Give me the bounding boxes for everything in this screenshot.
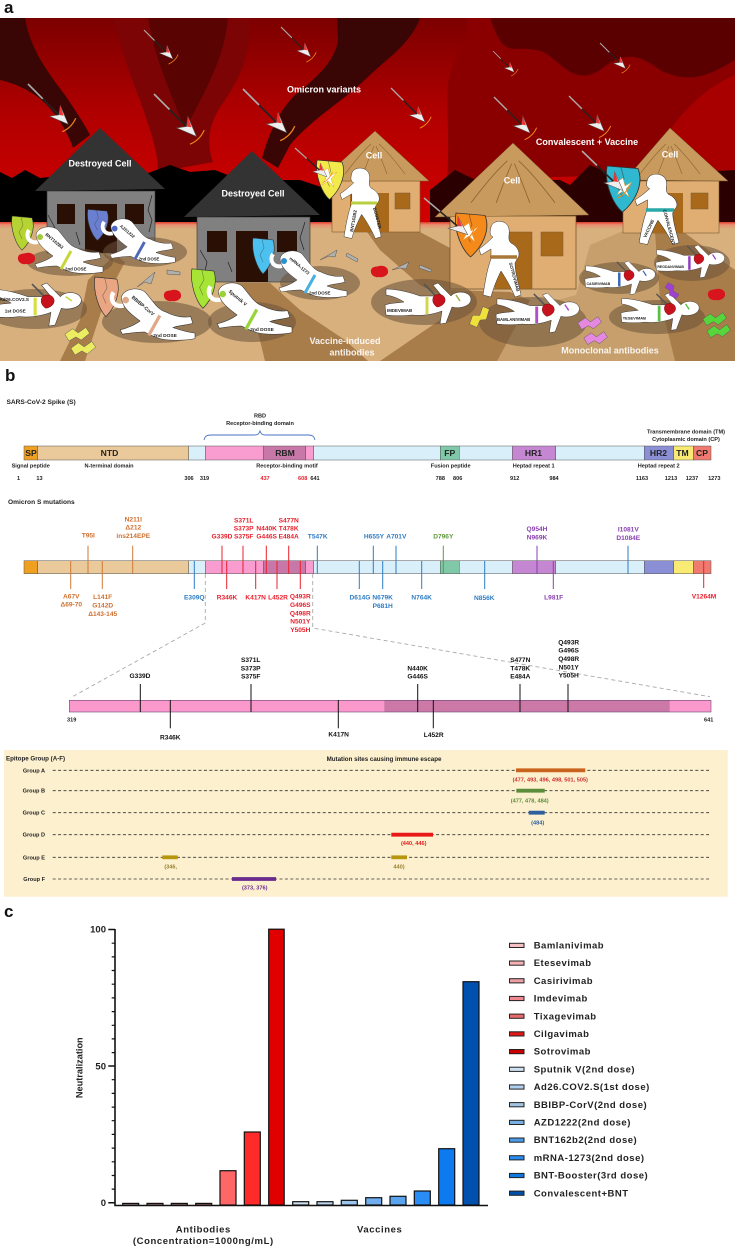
legend names: BBIBP-CorV(2nd dose) [534, 1100, 647, 1111]
residue numbers: 788 [436, 476, 445, 482]
group site labels: (477, 493, 496, 498, 501, 505) [513, 777, 588, 783]
omicron arrows [21, 22, 631, 146]
NTD mutation labels: N211I [125, 516, 142, 523]
NTD mutation labels: Δ143-145 [88, 611, 117, 618]
RBD mutation labels: G446S [256, 534, 278, 541]
crawling figure: BBIBP-CorV [94, 277, 195, 340]
standing figure: monoclonal with orange shield: SOTROVIMAB [508, 262, 521, 292]
domain names in bar: RBM [275, 448, 295, 458]
residue numbers: 912 [510, 476, 519, 482]
x axis group labels: Antibodies [176, 1224, 231, 1236]
x axis group labels: Vaccines [357, 1224, 402, 1236]
group site bars [162, 770, 585, 879]
group site labels: (440, 446) [401, 841, 427, 847]
RBD mutation labels: S373P [234, 526, 254, 533]
legend names: Cilgavimab [534, 1029, 589, 1040]
residue numbers: 1163 [636, 476, 648, 482]
RBD mutation labels: S375F [234, 534, 253, 541]
legend swatches [510, 943, 524, 1195]
crawling figure: mRNA-1273: 2nd DOSE [309, 290, 331, 296]
RBD enlarged bar [69, 700, 711, 712]
NTD mutation labels: Δ69-70 [60, 602, 82, 609]
crawling figure: BNT162b2: 2nd DOSE [65, 266, 87, 272]
crawling figure: AZD1222: 2nd DOSE [139, 257, 160, 262]
other mutation labels: L981F [544, 595, 563, 602]
TM and CP labels: Transmembrane domain (TM) [647, 430, 725, 436]
other mutation labels [433, 526, 717, 602]
crawling figure: BNT162b2 [12, 216, 103, 274]
x axis group labels: (Concentration=1000ng/mL) [133, 1236, 274, 1247]
x axis group labels [133, 1224, 402, 1247]
legend names: Imdevimab [534, 994, 588, 1005]
domain names in bar: HR2 [650, 448, 667, 458]
residue numbers: 608 [298, 476, 307, 482]
group names [23, 768, 46, 883]
legend names: Etesevimab [534, 958, 592, 969]
house: cell 3 [320, 131, 429, 232]
standing figure: convalescent + vaccine with teal shield: CONVALESCENT [662, 209, 676, 245]
label: Omicron variants: Omicron variants [287, 84, 361, 94]
residue numbers: 306 [184, 476, 194, 482]
shield arrows [290, 143, 632, 244]
enlarged bar labels: S375F [241, 674, 260, 681]
blue mutation labels: N764K [411, 595, 432, 602]
RBD mutation labels: K417N [245, 594, 266, 601]
broken arrows on the ground [137, 250, 432, 287]
blue mutation labels: N679K [372, 595, 393, 602]
other mutation labels: N969K [527, 534, 547, 541]
RBD label: Receptor-binding domain [226, 421, 294, 427]
RBD brace [204, 431, 315, 440]
NTD mutation labels: G142D [92, 603, 113, 610]
group site labels: (484) [531, 820, 544, 826]
RBD label: RBD [254, 414, 266, 420]
RBD mutation labels: N501Y [290, 619, 311, 626]
domain names in bar: CP [696, 448, 708, 458]
enlarged bar labels: S373P [241, 665, 261, 672]
RBD mutation labels: Q493R [290, 593, 311, 600]
residue numbers: 1237 [686, 476, 698, 482]
label: Convalescent + Vaccine: Convalescent + Vaccine [536, 137, 638, 147]
domain names in bar: TM [676, 448, 689, 458]
panel b: spike protein domains [4, 399, 728, 897]
mountains [0, 165, 735, 228]
lying figure: TESEVIMAB: TESEVIMAB [623, 315, 646, 320]
enlarged bar labels [67, 639, 713, 742]
RBD mutation labels: Y505H [290, 627, 311, 634]
mutation bar [24, 561, 711, 574]
lying figure: TESEVIMAB [621, 293, 699, 330]
residue numbers: 1213 [665, 476, 677, 482]
legend names [534, 940, 650, 1199]
y axis tick labels: 0 [101, 1198, 106, 1209]
sky with smoke [0, 18, 735, 228]
group site labels [164, 777, 588, 892]
enlarged bar labels: Q493R [558, 639, 579, 646]
epitope background [4, 750, 728, 897]
RBD mutation labels [212, 518, 311, 634]
group site labels: 440) [393, 865, 405, 871]
domain descriptions: N-terminal domain [84, 464, 134, 470]
domain descriptions: Fusion peptide [431, 464, 471, 470]
label: Monoclonal antibodies: Monoclonal antibodies [561, 346, 659, 356]
crawling figure: BBIBP-CorV: 2nd DOSE [153, 333, 178, 339]
domain names in bar: SP [25, 448, 37, 458]
bars [123, 929, 479, 1205]
blue mutation labels: P681H [373, 603, 393, 610]
group names: Group F [23, 877, 46, 883]
panel a: battle scene [0, 18, 735, 361]
enlarged bar labels: K417N [328, 732, 349, 739]
domain names in bar: HR1 [525, 448, 542, 458]
lying figure: Ad26.COV2.S [0, 283, 81, 326]
crawling figure: Sputnik V: Sputnik V [227, 289, 248, 308]
blue mutation labels: H655Y [364, 533, 385, 540]
lying figure: BAMLANIVIMAB [496, 293, 579, 333]
RBD label [226, 414, 294, 427]
enlarged bar labels: S477N [510, 657, 531, 664]
residue numbers: 1 [17, 476, 20, 482]
mutation ticks [71, 546, 704, 589]
blue mutation labels: D614G [350, 595, 370, 602]
other mutation labels: Q954H [527, 526, 548, 533]
residue numbers: 319 [200, 476, 209, 482]
lying figure: REGDANVIMAB: REGDANVIMAB [657, 265, 684, 269]
lying figure: CASIRIVIMAB: CASIRIVIMAB [586, 282, 611, 286]
y axis tick labels: 50 [95, 1062, 106, 1072]
legend names: Tixagevimab [534, 1011, 597, 1022]
y axis tick labels: 100 [90, 924, 106, 936]
NTD mutation labels [60, 516, 151, 618]
house: cell 3: Cell [366, 150, 382, 160]
residue numbers: 1273 [708, 476, 721, 482]
residue numbers: 984 [549, 476, 560, 482]
lying figure: BAMLANIVIMAB: BAMLANIVIMAB [497, 317, 530, 322]
blue mutation labels: N856K [474, 595, 495, 602]
group names: Group E [23, 855, 45, 861]
panel c: neutralization bar chart [74, 924, 650, 1247]
other mutation labels: I1081V [618, 526, 639, 533]
group names: Group D [23, 833, 45, 839]
domain names in bar [25, 448, 708, 458]
RBD mutation labels: S477N [279, 518, 299, 525]
ground [0, 222, 735, 361]
enlarged bar labels: G496S [558, 648, 580, 655]
legend names: AZD1222(2nd dose) [534, 1118, 631, 1128]
enlarged bar labels: G446S [407, 674, 429, 681]
blue mutation labels: A701V [386, 533, 407, 540]
domain descriptions: Heptad repeat 2 [638, 464, 680, 470]
group names: Group C [23, 811, 45, 817]
residue numbers: 437 [260, 476, 270, 482]
RBD mutation labels: Q498R [290, 610, 311, 617]
domain names in bar: NTD [101, 448, 118, 458]
standing figure: convalescent + vaccine with teal shield [606, 166, 679, 245]
epitope subheading: Mutation sites causing immune escape [327, 756, 442, 763]
RBD mutation labels: G339D [212, 533, 233, 540]
group site labels: (346, [164, 865, 178, 871]
enlarged bar labels: N501Y [559, 664, 579, 671]
legend names: Sputnik V(2nd dose) [534, 1064, 635, 1075]
y axis tick labels [90, 924, 106, 1209]
crawling figure: mRNA-1273 [253, 238, 347, 298]
enlarged bar ticks [140, 684, 568, 728]
RBD mutation labels: T478K [279, 526, 299, 533]
house: destroyed cell 1 [35, 128, 165, 253]
legend names: Casirivimab [534, 976, 593, 987]
panel label b: b [5, 366, 15, 385]
standing figure: monoclonal with orange shield [455, 213, 521, 297]
group names: Group B [23, 789, 45, 795]
legend [510, 940, 650, 1199]
house: destroyed cell 2 [184, 151, 320, 282]
legend names: Bamlanivimab [534, 940, 604, 952]
enlarged bar labels: S371L [241, 657, 260, 664]
standing figure: BNT162b2 booster with shield: BOOSTER [372, 207, 383, 230]
domain descriptions: Heptad repeat 1 [513, 464, 555, 470]
axes [108, 929, 488, 1206]
house: cell 5 [623, 128, 728, 233]
house: cell 4 [435, 143, 589, 289]
group site labels: (477, 478, 484) [511, 798, 549, 804]
standing figure: BNT162b2 booster with shield [317, 160, 383, 239]
house: destroyed cell 1: Destroyed Cell [68, 158, 132, 168]
panel label c: c [4, 902, 13, 921]
blue mutation labels [184, 533, 495, 610]
legend names: BNT162b2(2nd dose) [534, 1135, 637, 1146]
TM and CP labels [647, 430, 725, 443]
NTD mutation labels: A67V [63, 594, 80, 601]
residue numbers: 806 [453, 476, 462, 482]
RBD mutation labels: N440K [256, 526, 277, 533]
legend names: Convalescent+BNT [534, 1188, 629, 1199]
lying figure: Ad26.COV2.S: 1st DOSE [5, 308, 26, 313]
RBD mutation labels: R346K [217, 594, 237, 601]
NTD mutation labels: L141F [93, 594, 112, 601]
label: Vaccine-induced antibodies: antibodies [329, 348, 375, 358]
crawling figure: AZD1222 [87, 209, 175, 264]
blue mutation labels: T547K [308, 533, 328, 540]
blue mutation labels: E309Q [184, 595, 205, 602]
standing figure: BNT162b2 booster with shield: BNT162B2 [349, 209, 358, 232]
NTD mutation labels: Δ212 [125, 525, 141, 532]
crawling figure: AZD1222: AZD1222 [119, 224, 136, 239]
house: cell 5: Cell [662, 150, 678, 160]
spike domain bar [24, 446, 711, 460]
other mutation labels: D1084E [616, 535, 641, 542]
legend names: BNT-Booster(3rd dose) [534, 1171, 648, 1182]
residue numbers: 641 [310, 476, 320, 482]
other mutation labels: D796Y [433, 534, 454, 541]
enlarged bar labels: Q498R [558, 656, 579, 663]
RBD mutation labels: G496S [290, 602, 311, 609]
crawling figure: Sputnik V [191, 269, 292, 334]
crawling figure: BBIBP-CorV: BBIBP-CorV [130, 295, 156, 318]
residue numbers: 13 [36, 476, 43, 482]
TM and CP labels: Cytoplasmic domain (CP) [652, 437, 720, 443]
epitope heading: Epitope Group (A-F) [6, 755, 65, 762]
enlarged bar labels: G339D [130, 673, 151, 680]
lying figure: IMDEVIMAB [385, 283, 471, 324]
crawling figure: mRNA-1273: mRNA-1273 [288, 256, 311, 276]
house: destroyed cell 2: Destroyed Cell [221, 188, 285, 198]
lying figure: REGDANVIMAB [656, 245, 725, 278]
domain names in bar: FP [444, 448, 455, 458]
enlarged bar labels: R346K [160, 735, 181, 742]
epitope group panel [4, 750, 728, 897]
crawling figure: BNT162b2: BNT162B2 [44, 232, 65, 250]
y axis title: Neutralization [74, 1037, 84, 1098]
lying figure: Ad26.COV2.S: Ad26.COV2.S [0, 297, 29, 302]
enlarged bar labels: 641 [704, 718, 713, 724]
residue numbers [17, 476, 721, 482]
enlarged bar labels: 319 [67, 718, 76, 724]
lying figure: CASIRIVIMAB [585, 261, 655, 295]
enlarged bar labels: N440K [407, 665, 428, 672]
other mutation labels: V1264M [692, 594, 717, 601]
group names: Group A [23, 768, 45, 774]
house: cell 4: Cell [504, 176, 520, 186]
heading: Omicron S mutations: Omicron S mutations [8, 499, 75, 506]
legend names: Sotrovimab [534, 1047, 591, 1058]
broken antibody fragments [64, 281, 732, 358]
RBD mutation labels: E484A [279, 534, 299, 541]
domain descriptions: Signal peptide [12, 464, 50, 470]
domain descriptions [12, 464, 680, 470]
group site labels: (373, 376) [242, 886, 268, 892]
legend names: mRNA-1273(2nd dose) [534, 1153, 645, 1164]
enlarged bar labels: E484A [510, 674, 531, 681]
RBD mutation labels: S371L [234, 518, 253, 525]
lying figure: IMDEVIMAB: IMDEVIMAB [387, 308, 412, 313]
zoom guide lines [72, 574, 710, 697]
legend names: Ad26.COV2.S(1st dose) [534, 1082, 650, 1093]
standing figure: convalescent + vaccine with teal shield: VACCINE [642, 219, 655, 238]
enlarged bar labels: Y505H [559, 673, 579, 680]
RBD mutation labels: L452R [268, 594, 288, 601]
NTD mutation labels: ins214EPE [116, 533, 151, 540]
enlarged bar labels: T478K [510, 665, 530, 672]
label: Vaccine-induced antibodies: Vaccine-induced [309, 336, 381, 346]
blood splats [18, 253, 725, 301]
group dashed lines [53, 770, 710, 879]
crawling figure: Sputnik V: 2nd DOSE [250, 327, 275, 333]
heading: SARS-CoV-2 Spike: SARS-CoV-2 Spike (S) [6, 399, 76, 406]
domain descriptions: Receptor-binding motif [256, 464, 318, 470]
figure shadows [0, 237, 730, 347]
NTD mutation labels: T95I [82, 532, 95, 539]
enlarged bar labels: L452R [424, 732, 444, 739]
